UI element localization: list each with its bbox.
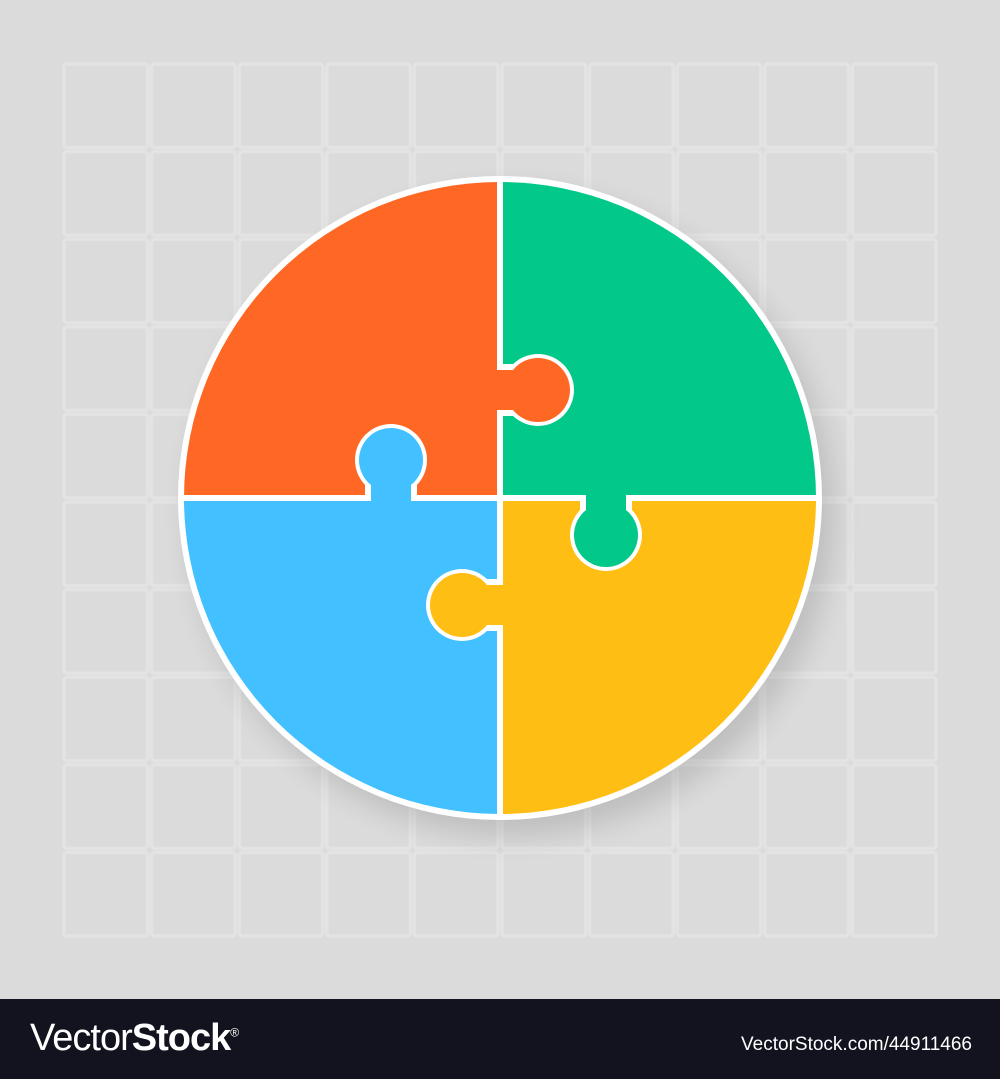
- puzzle graphic: [178, 176, 842, 844]
- footer logo: VectorStock®: [30, 1017, 238, 1059]
- puzzle circle: [170, 170, 833, 831]
- tab: green into yellow: [570, 488, 642, 571]
- piece: orange: [170, 170, 497, 495]
- footer: [0, 999, 1000, 1079]
- tab: blue into orange: [355, 424, 427, 508]
- piece: yellow: [503, 501, 816, 814]
- tab: yellow into blue: [426, 569, 510, 641]
- piece: green: [503, 170, 833, 495]
- piece: blue: [170, 501, 497, 831]
- footer url: VectorStock.com/44911466: [741, 1034, 972, 1055]
- tab: orange into green: [490, 354, 574, 426]
- shadow: [190, 192, 834, 836]
